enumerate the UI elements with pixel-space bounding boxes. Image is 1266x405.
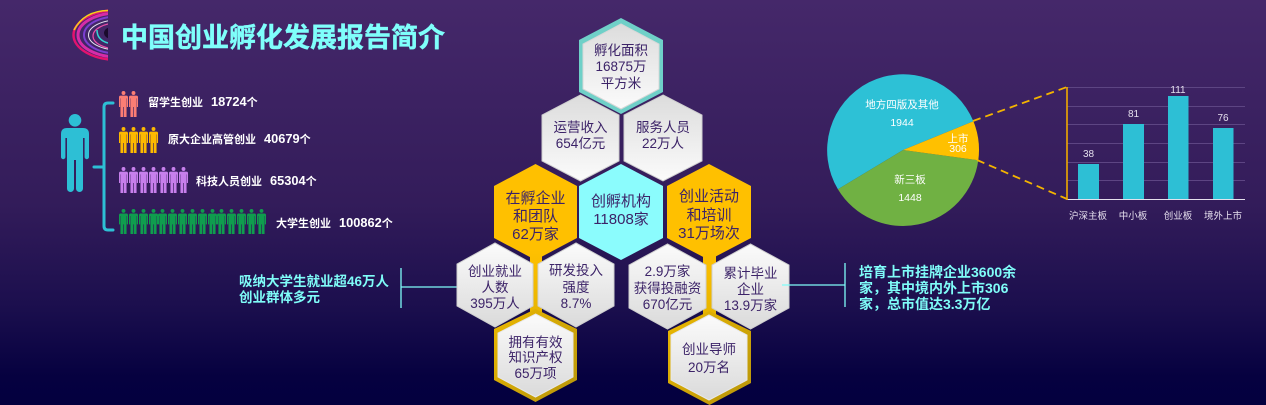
hexagon: patents frame: [494, 309, 577, 402]
hexagon: graduates: 企业: [737, 281, 764, 297]
hexagon: R&D intensity: 研发投入: [549, 263, 603, 278]
hexagon: patents: [498, 314, 573, 397]
callout: employment: 吸纳大学生就业超46万人: [239, 273, 390, 289]
row: university students: [119, 209, 266, 234]
title: 中国创业孵化发展报告简介: [121, 23, 445, 53]
icon: swirling logo: [72, 9, 108, 61]
label: technologists: 科技人员创业 65304个: [196, 173, 317, 188]
pie chart: 新三板: [894, 173, 926, 186]
bar chart: 38: [1083, 149, 1094, 160]
connector arrows: pie to bars: [973, 87, 1067, 199]
hexagon: incubation area: 孵化面积: [594, 43, 648, 58]
hexagon: mentors: 创业导师: [682, 342, 736, 357]
hexagon: incubated firms: [494, 164, 577, 260]
hexagon: events and training: 创业活动: [679, 188, 739, 205]
hexagon: patents: 拥有有效: [508, 335, 563, 350]
icon: large person: [61, 114, 89, 192]
hexagon: operating revenue: 运营收入: [554, 120, 608, 135]
hexagon: financing: 2.9万家: [645, 263, 691, 279]
callout: employment: 创业群体多元: [239, 289, 320, 305]
hexagon: service staff: 服务人员: [636, 120, 690, 135]
callout: listed companies: [782, 263, 1016, 312]
callout: listed companies: 家，总市值达3.3万亿: [859, 296, 990, 312]
hexagon: incubation area: [583, 24, 659, 109]
hexagon: incubation area: 平方米: [601, 76, 642, 91]
pie chart: 地方四版及其他: [865, 98, 939, 111]
hexagon: mentors: [671, 315, 747, 400]
pie chart: 上市: [948, 132, 968, 145]
hexagon: R&D intensity: [538, 243, 614, 327]
hexagon: financing: [629, 244, 706, 329]
label: former executives: 原大企业高管创业 40679个: [168, 131, 311, 146]
hexagon: incubation area frame: [579, 18, 663, 114]
row: technologists: [119, 167, 188, 193]
callout: listed companies: 培育上市挂牌企业3600余: [859, 264, 1016, 280]
bracket: [94, 103, 113, 230]
panel: founder types: [61, 91, 393, 234]
pie chart: 1944: [890, 117, 914, 129]
hexagon: operating revenue: [542, 95, 619, 181]
row: returned overseas students: [119, 91, 138, 117]
hexagon: central institutions: 创孵机构: [591, 193, 651, 210]
hexagon: jobs: 人数: [482, 280, 509, 295]
label: returned overseas students: 留学生创业 18724个: [148, 94, 258, 109]
gold gap between left white hexagons: [530, 250, 542, 318]
hexagon: mentors: 20万名: [688, 360, 730, 375]
hexagon: events and training: [667, 164, 751, 260]
bar chart: 76: [1217, 113, 1229, 124]
hexagon: financing: 670亿元: [643, 297, 692, 312]
hexagon: R&D intensity: 强度: [562, 280, 590, 295]
bar chart: 81: [1128, 109, 1139, 120]
hexagon: R&D intensity: 8.7%: [561, 296, 591, 311]
bar chart: 111: [1170, 85, 1186, 96]
hexagon: patents: 知识产权: [508, 349, 563, 365]
bar chart: [1067, 85, 1245, 222]
hexagon: patents: 65万项: [514, 366, 557, 381]
pie chart: 306: [949, 143, 967, 155]
hexagon: financing: 获得投融资: [634, 280, 701, 296]
bar chart: 沪深主板: [1069, 210, 1107, 222]
hexagon: service staff: [624, 95, 702, 181]
hexagon: events and training: 和培训: [686, 207, 732, 224]
bar chart: 中小板: [1119, 210, 1148, 222]
hexagon: central institutions: [579, 164, 663, 260]
hexagon: service staff: 22万人: [642, 136, 685, 151]
hexagon: central institutions: 11808家: [593, 211, 649, 228]
hexagon: jobs: 创业就业: [468, 264, 522, 279]
hexagon: mentors frame: [668, 311, 751, 405]
pie chart: [827, 74, 979, 226]
callout: listed companies: 家，其中境内外上市306: [859, 280, 1009, 296]
hexagon: incubated firms: 和团队: [513, 208, 558, 225]
hexagon: jobs: [457, 243, 533, 327]
hexagon: graduates: 13.9万家: [724, 297, 778, 313]
label: university students: 大学生创业 100862个: [276, 215, 393, 230]
hexagon: jobs: 395万人: [470, 296, 520, 311]
row: former executives: [119, 127, 158, 153]
hexagon: operating revenue: 654亿元: [556, 136, 605, 151]
callout: employment: [239, 268, 457, 308]
hexagon: incubation area: 16875万: [595, 59, 647, 74]
hexagon: incubated firms: 62万家: [512, 226, 559, 243]
bar chart: 境外上市: [1204, 210, 1242, 222]
panel: hexagon cluster: [457, 18, 789, 405]
gold gap between right white hexagons: [703, 250, 716, 318]
bar chart: 创业板: [1164, 210, 1193, 222]
hexagon: graduates: [712, 244, 789, 329]
hexagon: incubated firms: 在孵企业: [505, 189, 566, 207]
hexagon: events and training: 31万场次: [678, 225, 740, 242]
pie chart: 1448: [898, 192, 922, 204]
hexagon: graduates: 累计毕业: [724, 266, 778, 281]
